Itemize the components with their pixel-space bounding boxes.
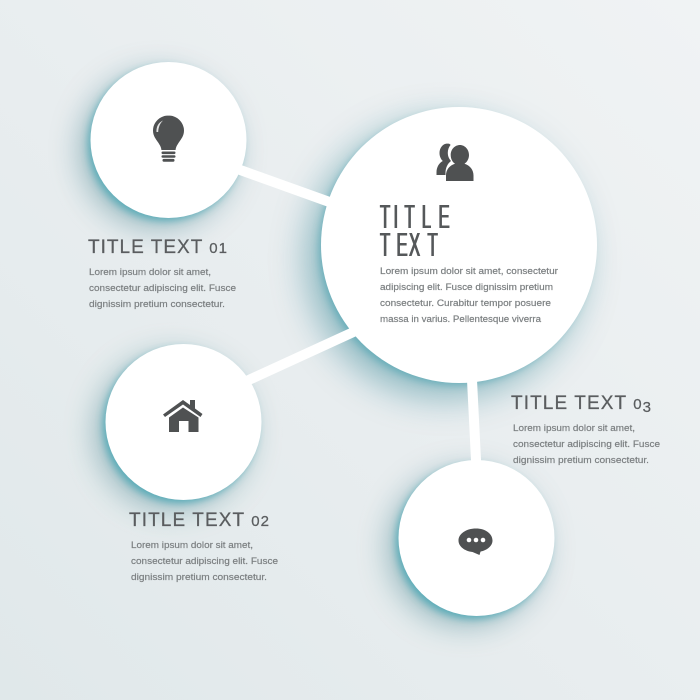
circle shadows	[80, 67, 591, 626]
text block 03	[511, 393, 660, 466]
icon: light bulb	[153, 116, 184, 162]
connector: bulb to main	[232, 167, 335, 204]
text block 01	[88, 237, 236, 310]
heading 02: TITLE TEXT 02	[129, 510, 269, 531]
body 03: consectetur adipiscing elit. Fusce	[513, 439, 660, 450]
body 01: dignissim pretium consectetur.	[89, 299, 225, 310]
main title: TEXT	[380, 226, 438, 264]
connector: main to chat	[472, 370, 476, 470]
main body text: consectetur. Curabitur tempor posuere	[380, 298, 551, 309]
body 01: consectetur adipiscing elit. Fusce	[89, 283, 236, 294]
connector: house to main	[240, 329, 360, 384]
circle: bulb	[90, 62, 246, 218]
body 03: Lorem ipsum dolor sit amet,	[513, 423, 635, 434]
body 02: consectetur adipiscing elit. Fusce	[131, 556, 278, 567]
main body text: Lorem ipsum dolor sit amet, consectetur	[380, 266, 559, 277]
body 02	[131, 540, 278, 583]
body 03	[513, 423, 660, 466]
icon: speech bubble	[458, 528, 492, 555]
body 02: Lorem ipsum dolor sit amet,	[131, 540, 253, 551]
main body text: massa in varius. Pellentesque viverra	[380, 314, 542, 325]
body 02: dignissim pretium consectetur.	[131, 572, 267, 583]
main title	[380, 198, 450, 264]
body 03: dignissim pretium consectetur.	[513, 455, 649, 466]
heading 03: TITLE TEXT 0	[511, 393, 642, 414]
heading 03: 3	[643, 399, 651, 416]
main circle	[321, 107, 597, 383]
icon: house	[163, 400, 202, 432]
icon: people	[436, 144, 474, 181]
body 01	[89, 267, 236, 310]
main title: TITLE	[380, 198, 450, 236]
circle: chat	[398, 460, 554, 616]
heading 01: TITLE TEXT 01	[88, 237, 227, 258]
circle: house	[106, 344, 262, 500]
main body text	[380, 266, 559, 325]
text block 02	[129, 510, 278, 583]
body 01: Lorem ipsum dolor sit amet,	[89, 267, 211, 278]
main body text: adipiscing elit. Fusce dignissim pretium	[380, 282, 553, 293]
